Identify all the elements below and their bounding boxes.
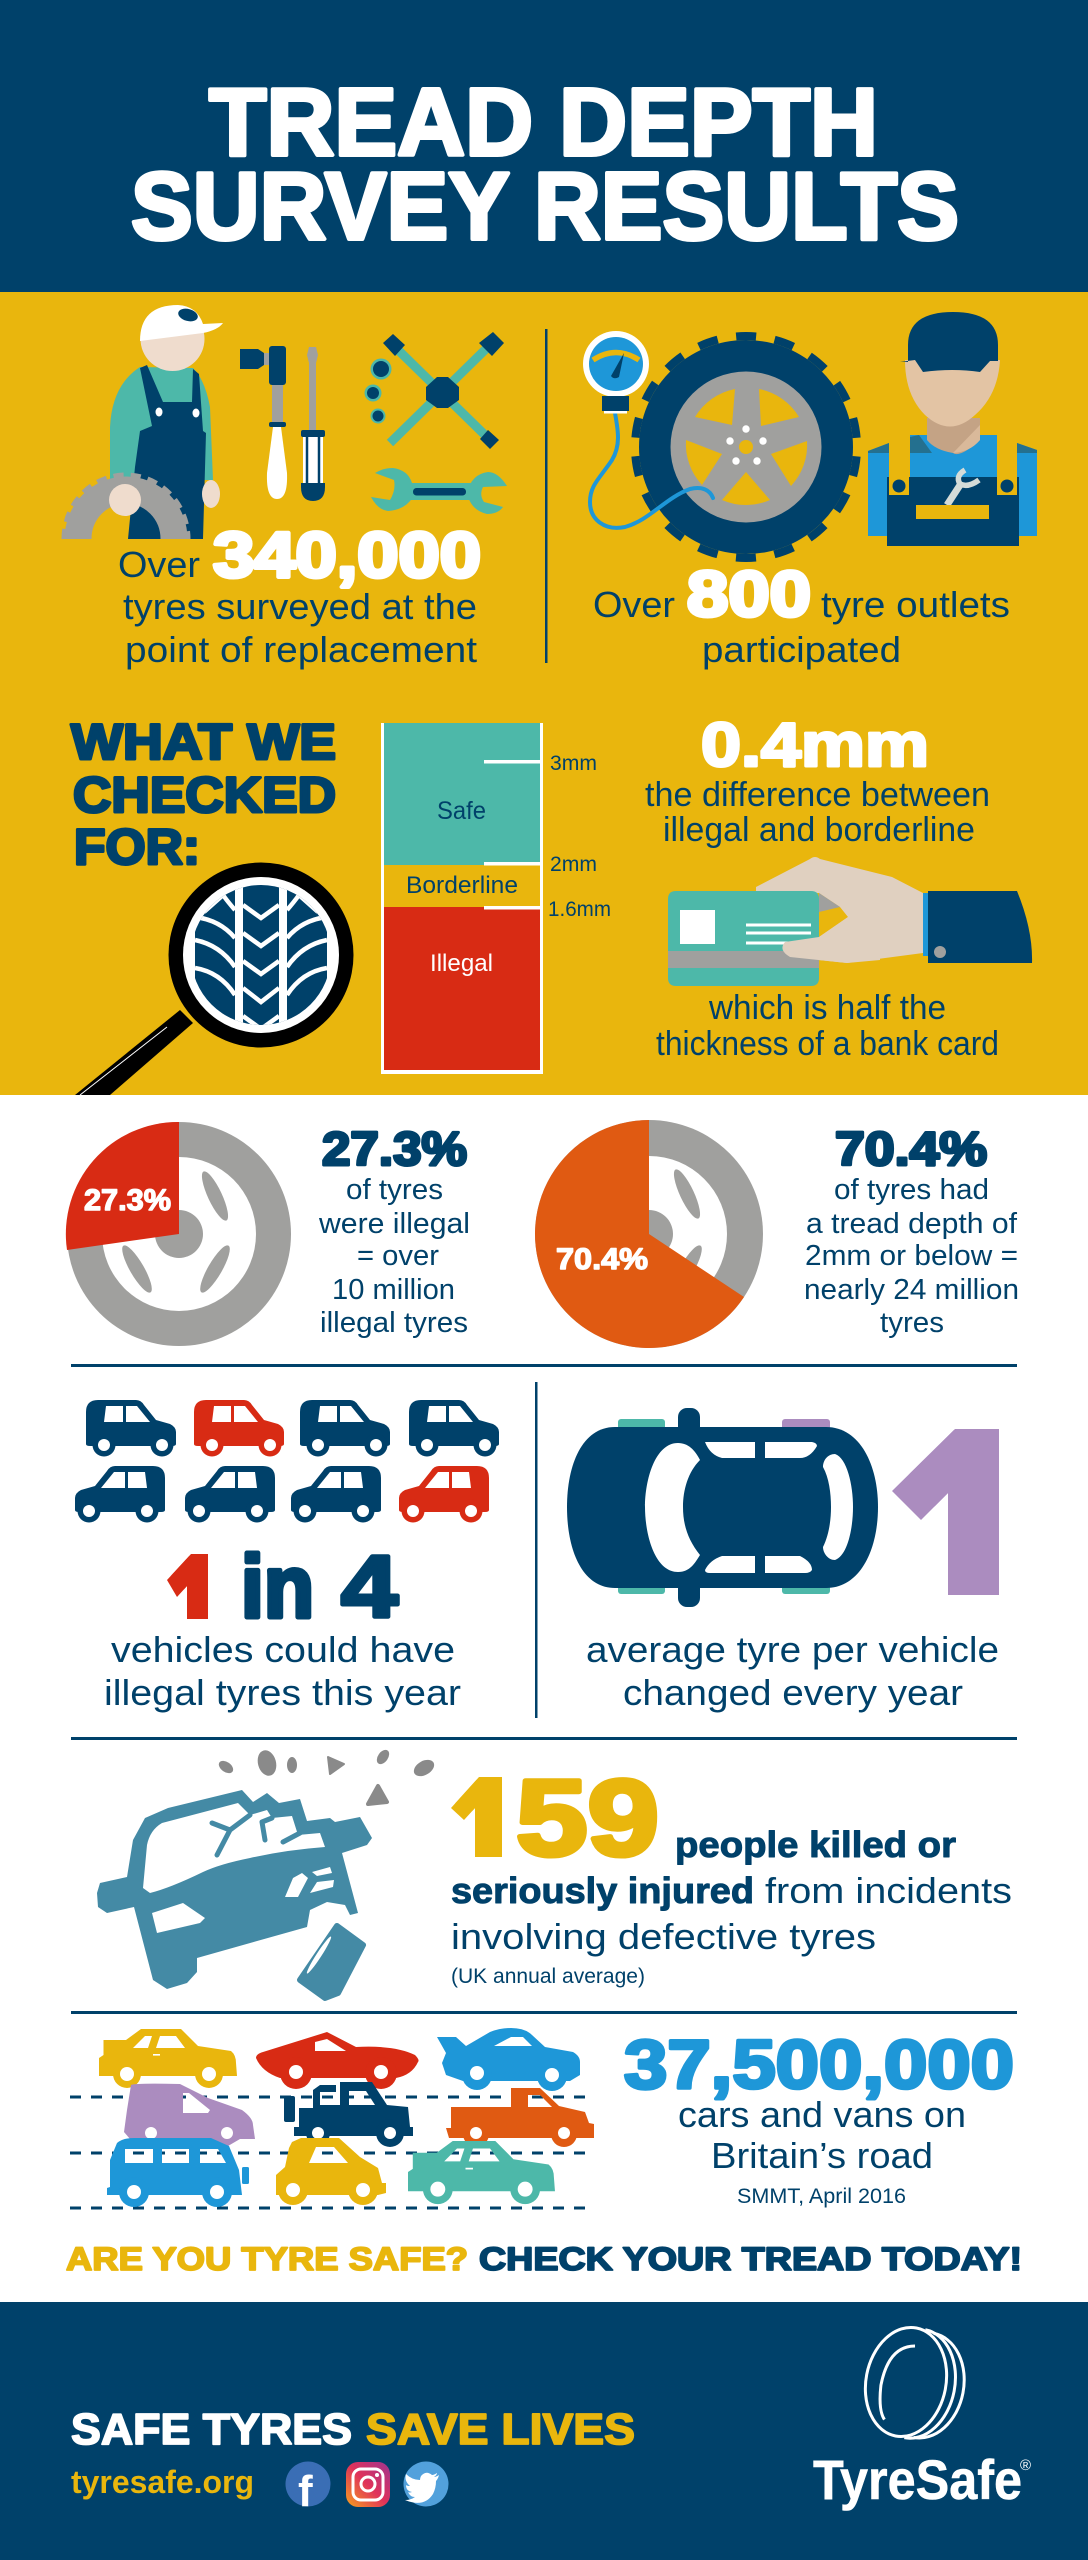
icon: facebook	[286, 2462, 330, 2516]
title: TREAD DEPTH	[209, 69, 878, 176]
heading: what we checked for: CHECKED	[73, 767, 336, 823]
text: average tyre per vehicle: changed every year	[623, 1672, 963, 1713]
text: 1 in 4 vehicles: 4	[341, 1537, 398, 1636]
text: 27.3% of tyres were illegal: illegal tyres	[320, 1307, 468, 1339]
header band with title	[0, 0, 1088, 292]
icon: hand holding bank card	[668, 857, 1032, 986]
slogan	[71, 2405, 635, 2454]
text: 800 tyre outlets: 800	[687, 558, 811, 630]
text: 1 in 4 vehicles: in	[241, 1537, 314, 1636]
text: 159 people killed or seriously injured: 59	[516, 1757, 659, 1878]
text: 159 people killed or seriously injured: seriously injured	[451, 1870, 754, 1911]
text: 159 people killed or seriously injured: 1	[448, 1756, 506, 1881]
icon: wheel brace and nuts	[364, 332, 504, 449]
chart: tread depth gauge	[381, 723, 611, 1074]
logo: TyreSafe	[813, 2320, 1031, 2511]
text: 70.4% of tyres: 70.4%	[835, 1122, 987, 1175]
car: yellow sedan	[99, 2029, 237, 2088]
text: 37,500,000 cars and vans	[624, 2026, 1014, 2208]
text: 159 people killed or seriously injured: from incidents	[765, 1870, 1012, 1911]
icon: spanner	[371, 468, 507, 514]
text: 37,500,000 cars and vans: 37,500,000	[624, 2026, 1014, 2103]
heading: what we checked for	[71, 714, 336, 875]
gauge labels: 1.6mm	[548, 898, 611, 921]
text: 340,000 tyres surveyed	[118, 519, 481, 670]
gauge labels: Safe	[437, 797, 486, 825]
logo: TyreSafe: TyreSafe	[813, 2448, 1022, 2511]
text: 70.4% of tyres: a tread depth of	[806, 1208, 1018, 1240]
pie chart: 70.4% at or below 2mm: 70.4%	[556, 1243, 648, 1276]
text: 1 in 4 vehicles: vehicles could have	[111, 1629, 455, 1670]
footer band	[0, 2302, 1088, 2560]
text: 159 people killed or seriously injured	[448, 1756, 1012, 1988]
icon: twitter	[404, 2462, 448, 2506]
icon: pressure gauge and hose	[583, 331, 713, 528]
text: 27.3% of tyres were illegal: = over	[357, 1240, 439, 1272]
text: 27.3% of tyres were illegal: of tyres	[346, 1174, 443, 1206]
text: 70.4% of tyres	[804, 1122, 1019, 1339]
text: 0.4mm difference: 0.4mm	[701, 711, 929, 780]
panel: survey scope and what we checked	[0, 292, 1088, 1095]
call to action: CHECK YOUR TREAD TODAY!	[479, 2241, 1022, 2277]
text: 800 tyre outlets: participated	[702, 629, 901, 670]
text: 1 in 4 vehicles: 1	[165, 1537, 210, 1639]
text: 159 people killed or seriously injured: involving defective tyres	[451, 1916, 876, 1957]
logo: TyreSafe: ®	[1020, 2457, 1031, 2474]
gauge labels	[406, 752, 611, 977]
minibus: blue	[107, 2138, 249, 2207]
icon: car from above	[567, 1408, 878, 1607]
text: 0.4mm difference: the difference between	[645, 776, 990, 814]
text: 800 tyre outlets: Over	[593, 584, 675, 625]
gauge labels: 2mm	[550, 853, 597, 876]
text: 27.3% of tyres were illegal: 10 million	[332, 1274, 455, 1306]
text: 37,500,000 cars and vans: cars and vans on	[678, 2094, 966, 2135]
pickup: orange	[446, 2088, 594, 2147]
icon: tyre with alloy wheel	[635, 336, 857, 558]
slogan: SAVE LIVES	[366, 2405, 635, 2454]
call to action: ARE YOU TYRE SAFE?	[66, 2241, 468, 2277]
text: average tyre per vehicle: average tyre per vehicle	[586, 1629, 999, 1670]
text: 70.4% of tyres: nearly 24 million	[804, 1274, 1019, 1306]
heading: what we checked for: FOR:	[74, 819, 200, 875]
text: 340,000 tyres surveyed: tyres surveyed at the	[123, 586, 477, 627]
text: 70.4% of tyres: of tyres had	[834, 1174, 989, 1206]
text: 0.4mm difference	[645, 711, 990, 849]
call to action	[66, 2241, 1022, 2277]
text: 800 tyre outlets	[593, 558, 1010, 670]
icon: crashed car with debris	[97, 1748, 437, 1998]
slogan: SAFE TYRES	[71, 2405, 352, 2454]
pie chart: 27.3% illegal tyres	[66, 1122, 291, 1346]
text: 27.3% of tyres were illegal: 27.3%	[322, 1122, 467, 1175]
title: SURVEY RESULTS	[131, 153, 959, 260]
website: tyresafe.org	[71, 2464, 254, 2500]
text: 1 in 4 vehicles: illegal tyres this year	[104, 1672, 461, 1713]
icon: screwdriver	[301, 347, 325, 501]
text: 340,000 tyres surveyed: point of replacement	[125, 629, 477, 670]
text: 70.4% of tyres: tyres	[880, 1307, 944, 1339]
pie chart: 70.4% at or below 2mm	[535, 1120, 763, 1348]
truck: navy	[284, 2082, 413, 2147]
car: teal sedan	[408, 2141, 555, 2204]
text: 159 people killed or seriously injured: people killed or	[675, 1824, 956, 1865]
pie chart: 27.3% illegal tyres: 27.3%	[84, 1184, 171, 1217]
text: 0.4mm difference: illegal and borderline	[663, 811, 975, 849]
text: 159 people killed or seriously injured: (UK annual average)	[451, 1965, 645, 1988]
icon: magnifying glass over tread	[75, 862, 354, 1095]
text: 1 in 4 vehicles	[104, 1537, 461, 1713]
gauge labels: Illegal	[430, 950, 493, 977]
title	[131, 69, 959, 260]
text: half the thickness of a bank card: thickness of a bank card	[656, 1025, 999, 1063]
van: purple	[124, 2084, 255, 2146]
text: 37,500,000 cars and vans: Britain’s road	[711, 2135, 933, 2176]
divider	[545, 329, 548, 663]
gauge labels: 3mm	[550, 752, 597, 775]
icon: facebook: f	[298, 2467, 313, 2516]
icon: ratchet	[240, 346, 287, 499]
car: blue hatchback	[437, 2028, 580, 2091]
text: 27.3% of tyres were illegal	[318, 1122, 470, 1339]
text: 340,000 tyres surveyed: 340,000	[213, 519, 481, 591]
numeral: 1: 1	[880, 1378, 1010, 1646]
text: 340,000 tyres surveyed: Over	[118, 544, 200, 585]
car: red sports	[256, 2032, 419, 2089]
icon: instagram	[346, 2462, 390, 2507]
icon: mechanic	[868, 312, 1037, 546]
text: half the thickness of a bank card: which is half the	[708, 989, 946, 1027]
text: 27.3% of tyres were illegal: were illegal	[318, 1208, 470, 1240]
illustration: road of assorted vehicles	[70, 2028, 594, 2208]
heading: what we checked for: WHAT WE	[71, 714, 336, 770]
text: 70.4% of tyres: 2mm or below =	[805, 1240, 1018, 1272]
text: average tyre per vehicle	[586, 1629, 999, 1713]
gauge labels: Borderline	[406, 872, 518, 899]
car: small yellow	[276, 2138, 386, 2205]
text: half the thickness of a bank card	[656, 989, 999, 1063]
icon grid: 8 vehicles, 2 red	[75, 1400, 499, 1522]
icon: worker with tyre	[65, 305, 223, 539]
text: 37,500,000 cars and vans: SMMT, April 2016	[737, 2185, 906, 2208]
text: 800 tyre outlets: tyre outlets	[821, 584, 1010, 625]
